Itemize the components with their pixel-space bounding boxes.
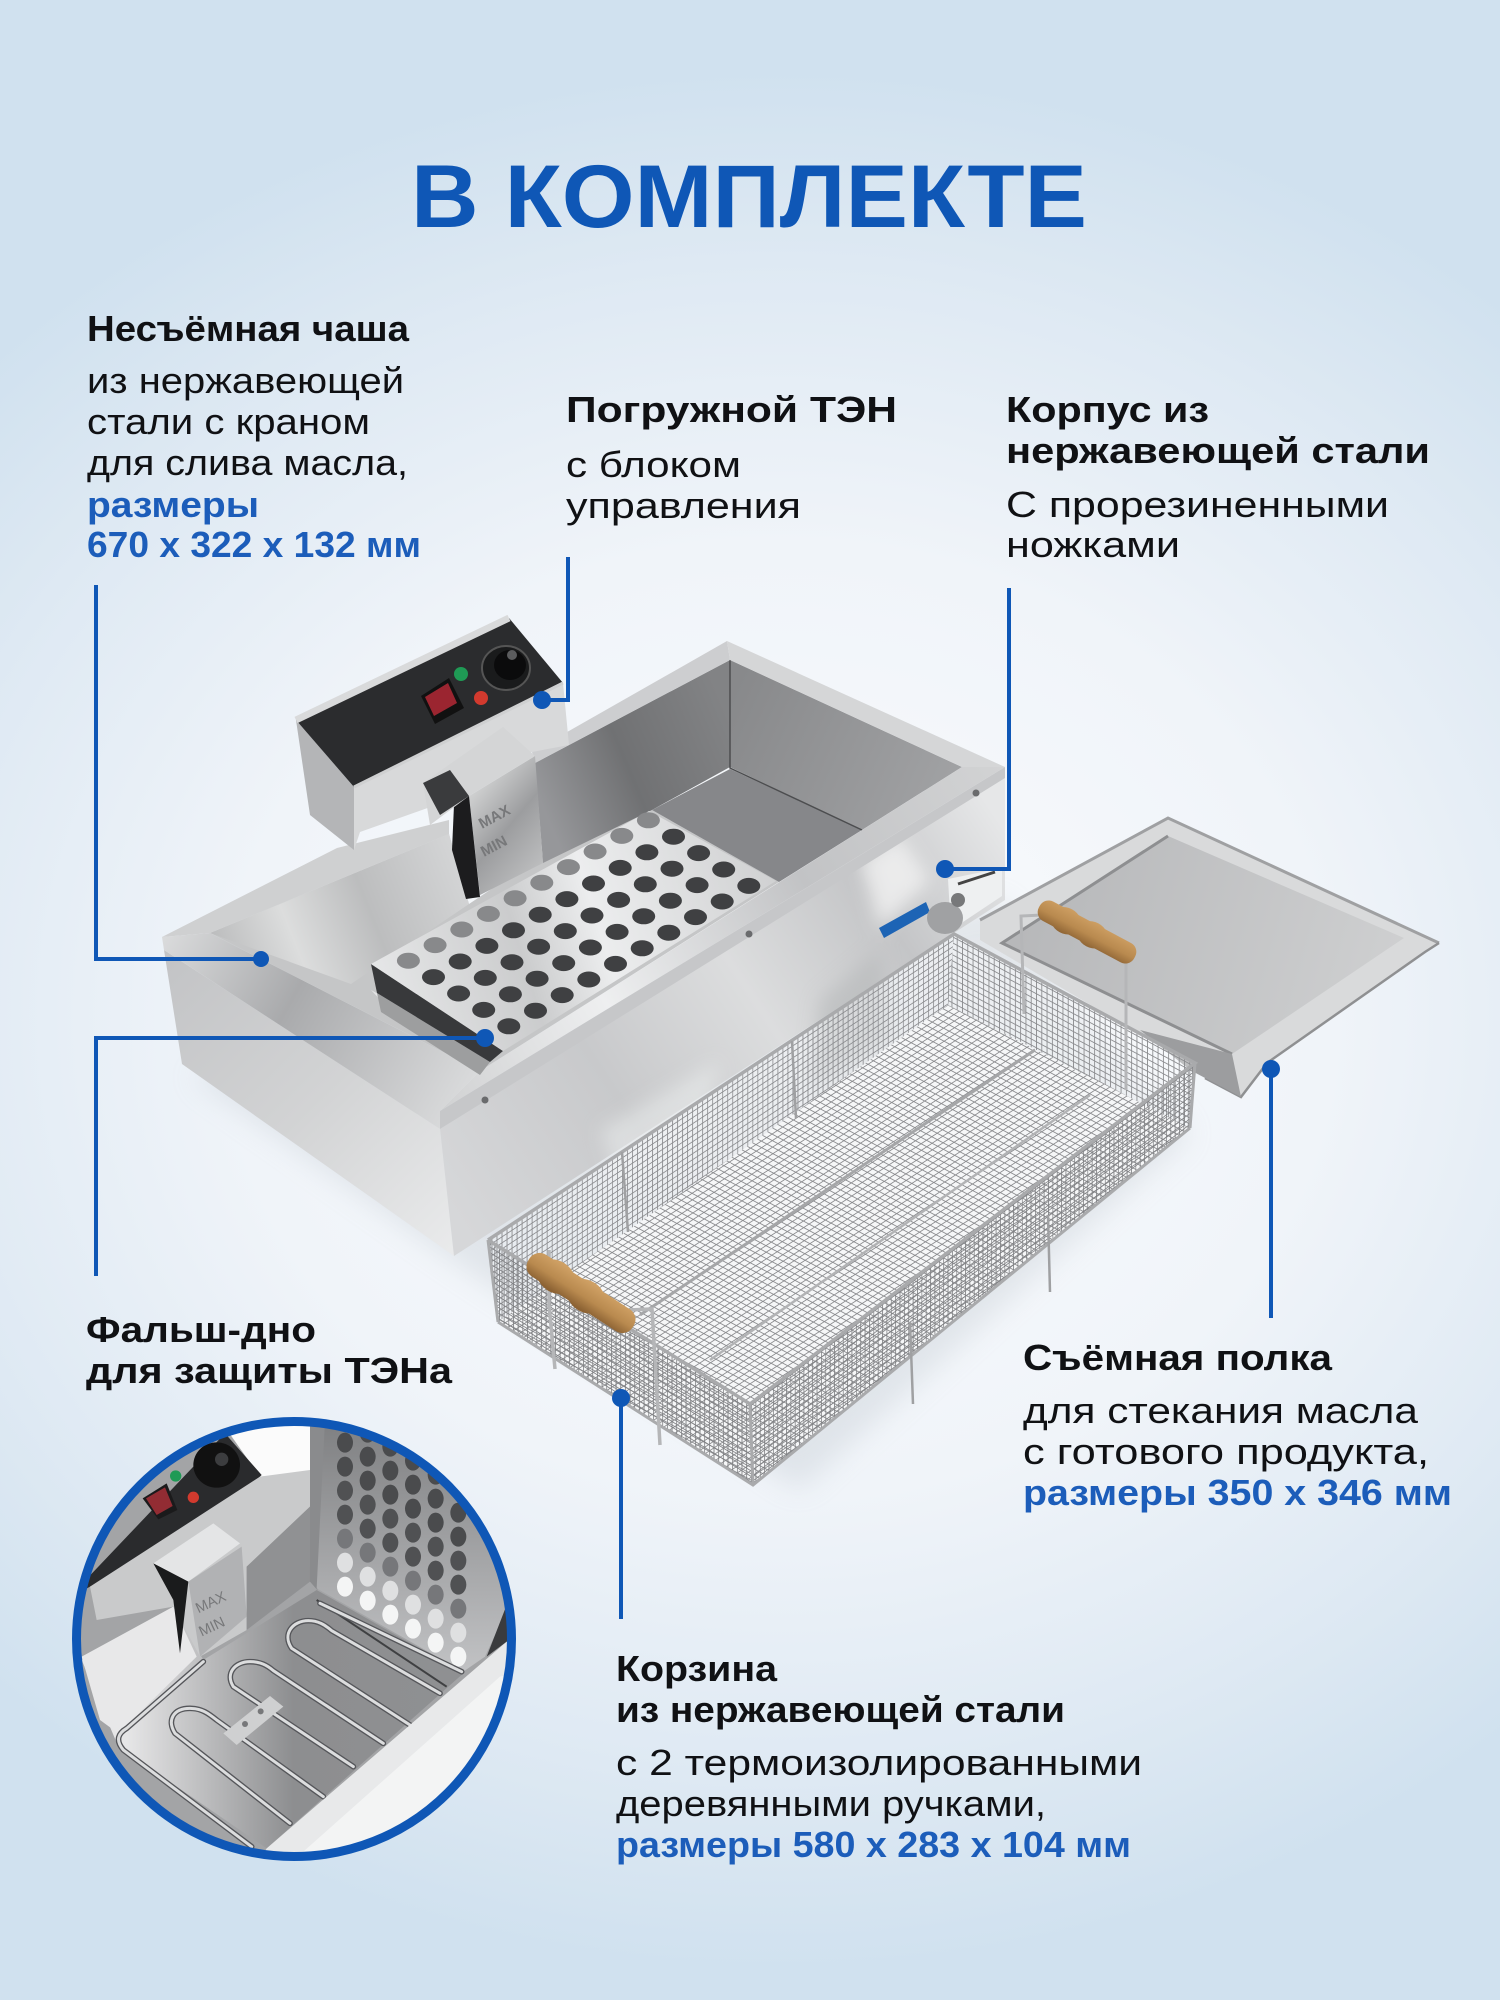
- control box: MAX: [476, 802, 513, 833]
- text block: basket: Корзина: [616, 1648, 778, 1689]
- false bottom plate: [371, 811, 776, 1075]
- indicator lights: [454, 667, 488, 705]
- text block: housing: [1006, 389, 1430, 565]
- inset circle: heating element: MAX: [193, 1589, 229, 1617]
- text block: shelf: для стекания масла: [1023, 1390, 1419, 1431]
- inset ring: [76, 1422, 512, 1856]
- floor shadow: [190, 900, 1190, 1490]
- callout line: bowl: [96, 585, 269, 967]
- drain tap and label: [879, 868, 1002, 938]
- product: fryer with shelf and basket: [162, 618, 1439, 1490]
- text block: heating element: [566, 389, 897, 526]
- callout line: false bottom: [96, 1029, 494, 1276]
- rivets: [482, 790, 980, 1104]
- text block: basket: деревянными ручками,: [616, 1783, 1046, 1824]
- front rim: [266, 1642, 507, 1852]
- power switch: [421, 678, 464, 724]
- callout line: heating element: [533, 557, 568, 709]
- text block: false bottom: [86, 1309, 453, 1391]
- text block: shelf: Съёмная полка: [1023, 1337, 1333, 1378]
- text block: bowl: из нержавеющей: [87, 360, 404, 401]
- rims: [162, 820, 449, 937]
- back groove: [317, 1600, 447, 1687]
- text block: heating element: управления: [566, 485, 801, 526]
- white wedge: [231, 1426, 310, 1476]
- control box: [296, 618, 569, 899]
- text block: basket: из нержавеющей стали: [616, 1689, 1065, 1730]
- callout line: shelf: [1262, 1060, 1280, 1318]
- control box: MIN: [478, 833, 510, 861]
- text block: shelf: с готового продукта,: [1023, 1431, 1429, 1472]
- text block: false bottom: Фальш-дно: [86, 1309, 316, 1350]
- text block: bowl: стали с краном: [87, 401, 370, 442]
- text block: false bottom: для защиты ТЭНа: [86, 1350, 453, 1391]
- inset circle: heating element: [72, 1417, 516, 1861]
- heating tubes: [119, 1603, 462, 1847]
- text block: basket: [616, 1648, 1142, 1865]
- text block: heating element: Погружной ТЭН: [566, 389, 897, 430]
- text block: housing: нержавеющей стали: [1006, 430, 1430, 471]
- basket: [488, 895, 1195, 1485]
- text block: housing: С прорезиненными: [1006, 484, 1389, 525]
- text block: basket: с 2 термоизолированными: [616, 1742, 1142, 1783]
- text block: shelf: размеры 350 x 346 мм: [1023, 1472, 1452, 1513]
- callout line: basket: [612, 1389, 630, 1619]
- panel: [87, 1436, 262, 1588]
- text block: housing: ножками: [1006, 524, 1180, 565]
- basin interior: [210, 810, 779, 1071]
- side wall: [310, 1426, 324, 1590]
- text block: basket: размеры 580 x 283 x 104 мм: [616, 1824, 1131, 1865]
- text block: shelf: [1023, 1337, 1452, 1513]
- removable shelf: [980, 818, 1439, 1097]
- text block: heating element: с блоком: [566, 444, 741, 485]
- fryer body: [162, 641, 1005, 1256]
- perforated wall: [316, 1428, 505, 1671]
- text block: bowl: 670 x 322 x 132 мм: [87, 524, 421, 565]
- text block: bowl: размеры: [87, 484, 259, 525]
- text block: bowl: для слива масла,: [87, 442, 408, 483]
- inset circle: heating element: MIN: [197, 1614, 228, 1640]
- near handle: [520, 1246, 660, 1445]
- bracket with level plate: [469, 756, 543, 895]
- callout line: housing: [936, 588, 1009, 878]
- text block: housing: Корпус из: [1006, 389, 1209, 430]
- title: В КОМПЛЕКТЕ: [411, 146, 1087, 246]
- far handle: [1021, 895, 1141, 1090]
- text block: bowl: [87, 308, 421, 565]
- text block: bowl: Несъёмная чаша: [87, 308, 410, 349]
- controls: [143, 1483, 177, 1519]
- thermostat knob: [482, 646, 530, 690]
- inner floor: [82, 1590, 463, 1848]
